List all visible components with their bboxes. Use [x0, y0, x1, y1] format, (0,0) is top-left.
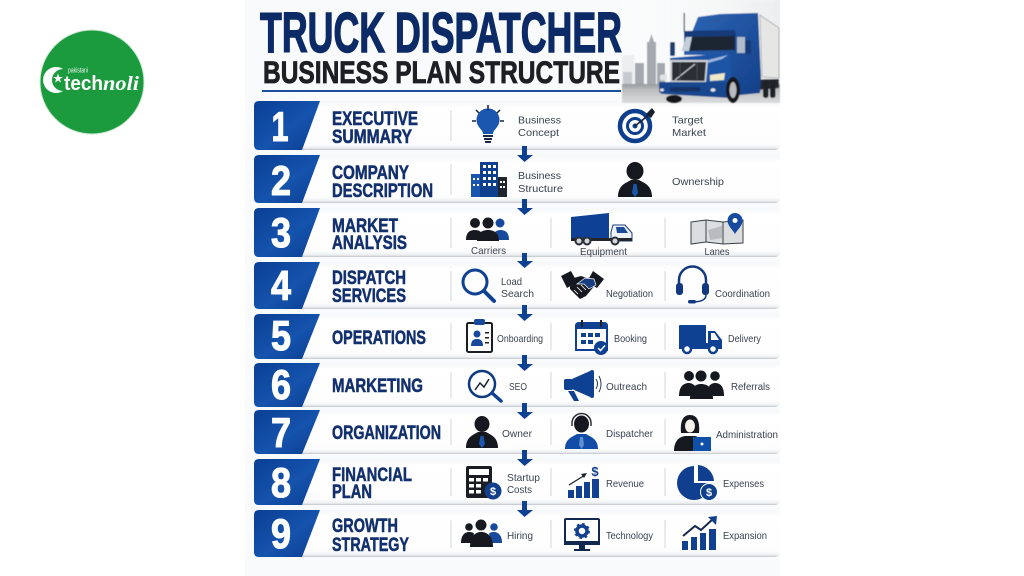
road [622, 84, 780, 103]
label: Search [501, 288, 534, 300]
label: Startup [507, 472, 540, 484]
panel: 7 organization: ORGANIZATION [332, 422, 441, 444]
panel: 1 executive summary: 1 [272, 103, 288, 150]
label [518, 170, 563, 195]
panel: 8 financial plan: 8 [271, 459, 291, 506]
label: Costs [507, 484, 532, 496]
icon: hiring people [461, 520, 502, 547]
panel: 2 company description: COMPANY [332, 162, 409, 184]
exhaust stack [684, 13, 685, 32]
label: Administration [716, 429, 778, 441]
label: Carriers [471, 245, 506, 257]
label: Referrals [731, 381, 770, 393]
logo: Pakistani Technoli: noli [103, 73, 139, 95]
panel: 9 growth strategy: STRATEGY [332, 534, 409, 556]
icon: calculator [466, 466, 502, 500]
label: Structure [518, 183, 563, 195]
panel: 5 operations [254, 312, 780, 359]
title: TRUCK DISPATCHER [260, 1, 622, 65]
icon: expansion chart [682, 516, 717, 550]
title [260, 1, 622, 92]
panel: 3 market analysis: MARKET [332, 215, 398, 237]
panel: 2 company description [254, 155, 780, 204]
panel: 6 marketing: MARKETING [332, 375, 423, 397]
panel: 1 executive summary [254, 101, 780, 150]
arrows between sections [517, 146, 533, 517]
icon: revenue chart [568, 464, 599, 498]
panel: 7 organization [254, 409, 780, 456]
logo: Pakistani Technoli: tech [64, 73, 103, 95]
label: Revenue [606, 478, 644, 490]
icon: delivery truck [679, 325, 722, 353]
panel: 4 dispatch services: SERVICES [332, 285, 406, 307]
logo: Pakistani Technoli [40, 30, 144, 134]
icon: calculator: $ [490, 486, 496, 498]
icon: referrals people [679, 370, 724, 399]
label [672, 114, 706, 139]
icon: owner person [466, 416, 498, 448]
label: Onboarding [497, 333, 543, 345]
label [518, 114, 561, 139]
icon: SEO magnifier [469, 371, 501, 401]
panel: 2 company description: 2 [271, 157, 291, 204]
left mirror [670, 42, 675, 56]
label: Lanes [704, 246, 730, 258]
icon: handshake [561, 271, 604, 299]
label: Outreach [606, 381, 647, 393]
label: Expenses [723, 478, 764, 490]
panel: 8 financial plan: PLAN [332, 481, 372, 503]
label: Business [518, 114, 561, 126]
windshield [682, 36, 735, 51]
panel: 5 operations: 5 [271, 312, 291, 359]
panel: 7 organization: 7 [271, 409, 291, 456]
skyline [623, 34, 665, 84]
icon: equipment truck [571, 213, 632, 244]
chassis [735, 79, 779, 92]
icon: administration [674, 415, 711, 451]
panel: 6 marketing [254, 361, 780, 408]
panel: 8 financial plan [254, 459, 780, 506]
label: Concept [518, 127, 559, 139]
icon: outreach megaphone [564, 370, 601, 401]
label [507, 472, 540, 496]
panel: 3 market analysis [254, 208, 780, 258]
trailer [760, 15, 779, 78]
label: Target [672, 114, 703, 126]
panel: 9 growth strategy: 9 [271, 510, 291, 557]
icon: dispatcher [565, 414, 598, 449]
label: Dispatcher [606, 428, 653, 440]
icon: revenue chart: $ [591, 464, 599, 479]
panel: 8 financial plan: FINANCIAL [332, 464, 412, 486]
panel: 1 executive summary: SUMMARY [332, 126, 412, 148]
cab [684, 13, 761, 97]
icon: headset [676, 266, 709, 304]
label: Coordination [715, 288, 770, 300]
label: SEO [509, 381, 527, 393]
header illustration: skyline and truck [622, 0, 780, 103]
label: Hiring [507, 530, 533, 542]
icon: magnifier [463, 270, 494, 301]
poster background [245, 0, 780, 576]
label: Technology [606, 530, 654, 542]
icon: expenses pie: $ [706, 487, 712, 499]
label: Equipment [580, 246, 627, 258]
logo: Pakistani Technoli: pakistani [68, 68, 88, 74]
label: Negotiation [606, 288, 653, 300]
label: Expansion [723, 530, 767, 542]
hood [670, 53, 732, 84]
panel: 9 growth strategy [254, 510, 780, 557]
label: Owner [502, 428, 532, 440]
grille [670, 60, 708, 83]
icon: carriers [466, 218, 509, 241]
label: Booking [614, 333, 647, 345]
panel: 3 market analysis: ANALYSIS [332, 232, 407, 254]
label: Load [501, 276, 522, 288]
label: Ownership [672, 176, 724, 188]
icon: owner [618, 162, 652, 197]
icon: buildings [471, 162, 507, 197]
wheels [666, 95, 682, 103]
panel: 2 company description: DESCRIPTION [332, 180, 433, 202]
label [501, 276, 534, 300]
panel: 4 dispatch services [254, 262, 780, 309]
panel: 1 executive summary: EXECUTIVE [332, 108, 418, 130]
icon: onboarding clipboard [467, 319, 492, 352]
panel: 9 growth strategy: GROWTH [332, 515, 398, 537]
panel: 6 marketing: 6 [271, 361, 291, 408]
icon: technology monitor [564, 519, 600, 551]
panel: 3 market analysis: 3 [271, 209, 291, 256]
label: Market [672, 127, 706, 139]
title: BUSINESS PLAN STRUCTURE [263, 54, 620, 90]
bumper [659, 82, 730, 98]
label: Delivery [728, 333, 762, 345]
panel: 4 dispatch services: 4 [271, 262, 292, 309]
label: Business [518, 170, 561, 182]
icon: expenses pie [677, 465, 718, 500]
icon: booking calendar [576, 320, 608, 355]
icon: light bulb [472, 105, 504, 143]
icon: target [620, 108, 655, 141]
icon: lanes map [691, 213, 743, 244]
panel: 4 dispatch services: DISPATCH [332, 267, 406, 289]
headlights [710, 73, 725, 81]
panel: 5 operations: OPERATIONS [332, 327, 426, 349]
